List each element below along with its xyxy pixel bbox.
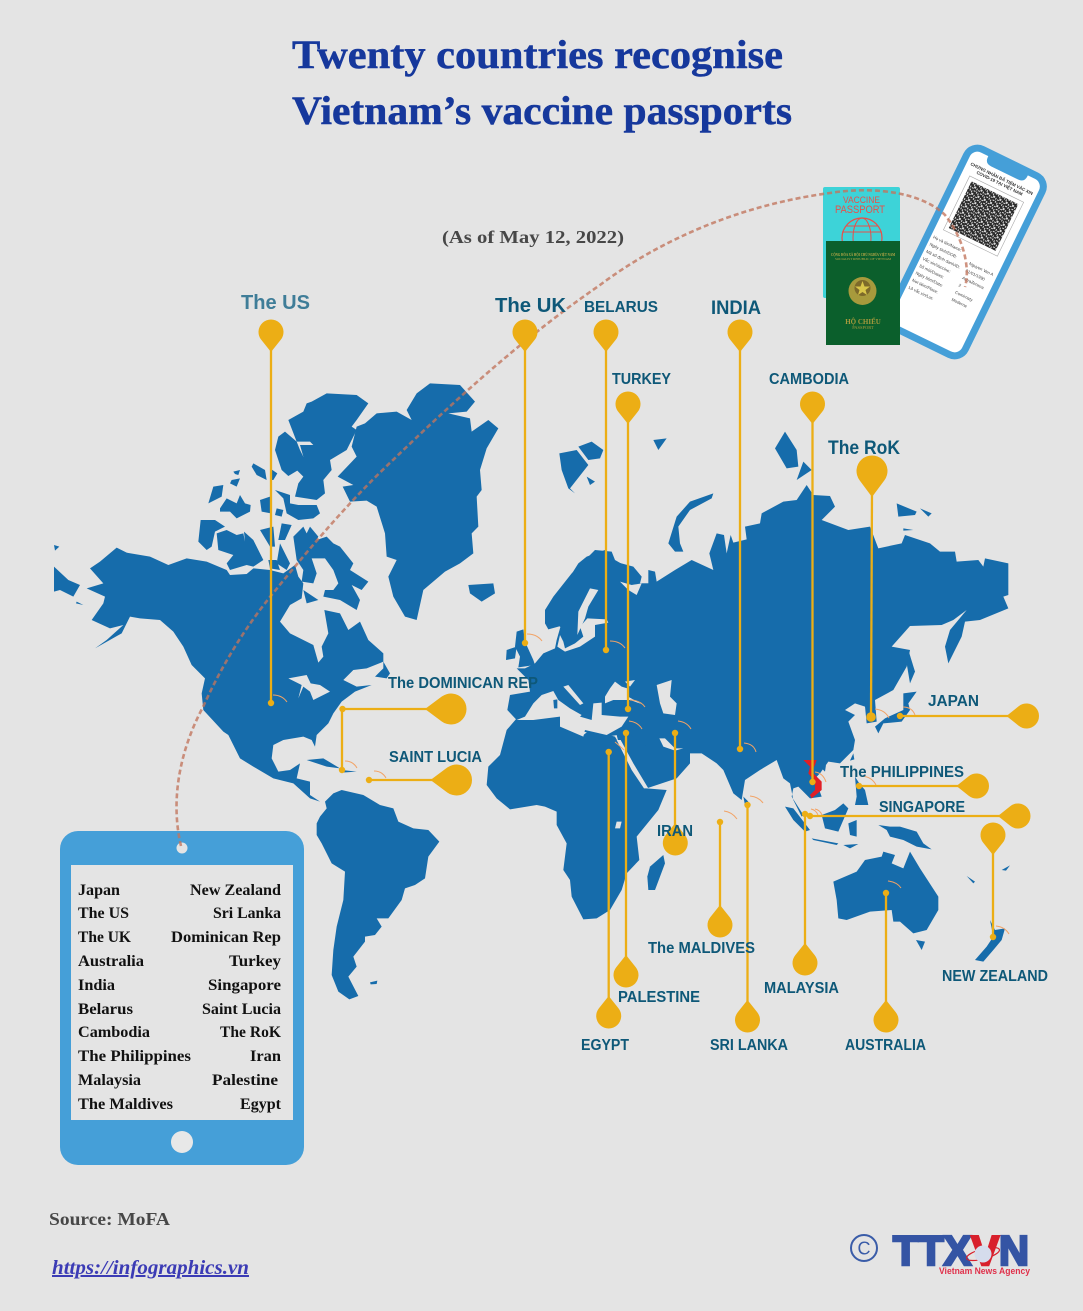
country list: Japan	[78, 882, 120, 899]
pin: Turkey	[616, 392, 645, 712]
map: South America, Africa, Madagascar	[317, 715, 667, 999]
phone with vaccine certificate: Ngày tiêm/Date:	[915, 270, 944, 288]
country list: Cambodia	[78, 1024, 150, 1041]
country list: The US	[78, 905, 129, 922]
country list: Singapore	[208, 977, 281, 994]
pin: Palestine	[614, 721, 642, 987]
phone with vaccine certificate: 01/01/1990	[965, 268, 986, 282]
country labels: EGYPT	[581, 1037, 629, 1054]
pin: Belarus	[594, 320, 625, 653]
country labels: The PHILIPPINES	[840, 764, 964, 781]
title	[292, 32, 792, 133]
country labels: BELARUS	[584, 299, 658, 316]
passport: green Vietnamese passport	[826, 241, 900, 345]
copyright icon	[851, 1235, 877, 1261]
country labels: PALESTINE	[618, 989, 700, 1006]
country labels: INDIA	[711, 298, 761, 319]
phone with vaccine certificate: Số mũi/Doses:	[918, 263, 945, 280]
country list: Egypt	[240, 1096, 282, 1113]
country labels: The UK	[495, 295, 567, 317]
phone with vaccine certificate: Nơi tiêm/Place:	[911, 278, 939, 295]
pin: Malaysia	[792, 811, 818, 975]
source: Source: MoFA	[49, 1209, 170, 1229]
passport: vaccine passport cover: PASSPORT	[835, 204, 885, 216]
country list: Saint Lucia	[202, 1001, 281, 1018]
country list: Australia	[78, 953, 144, 970]
phone with vaccine certificate: Ngày sinh/DOB:	[929, 242, 958, 259]
country labels: SRI LANKA	[710, 1037, 788, 1054]
country list: Malaysia	[78, 1072, 141, 1089]
tablet camera dot	[176, 842, 188, 854]
tablet listing countries	[60, 831, 304, 1165]
map: Eurasia and Arctic islands	[545, 432, 1008, 817]
map pins and connector lines	[258, 320, 1039, 1032]
country labels: The DOMINICAN REP	[388, 675, 538, 692]
map: North America and Greenland	[54, 383, 535, 802]
country labels: The US	[241, 292, 310, 314]
phone with vaccine certificate: Lô vắc xin/Lot:	[908, 285, 934, 301]
pin: Egypt	[596, 742, 624, 1028]
pin: The UK	[512, 320, 542, 646]
map: Europe and surrounding seas	[507, 550, 700, 788]
date note: (As of May 12, 2022)	[442, 227, 624, 248]
country labels: The RoK	[828, 438, 900, 459]
copyright icon: C	[858, 1238, 870, 1258]
phone with vaccine certificate: AstraZeneca	[961, 275, 985, 290]
website link text: https://infographics.vn	[52, 1257, 249, 1279]
TTXVN logo: TTXVN	[893, 1227, 1029, 1274]
map: Southeast Asia and Oceania	[743, 777, 1010, 962]
country list: Dominican Rep	[171, 929, 281, 946]
country list: The Maldives	[78, 1096, 173, 1113]
phone with vaccine certificate: Mã số định danh/ID:	[925, 249, 961, 270]
passport: green Vietnamese passport: PASSPORT	[852, 325, 874, 330]
pin: Iran	[663, 721, 691, 855]
country labels: The MALDIVES	[648, 940, 755, 957]
country list: Sri Lanka	[213, 905, 281, 922]
pin: The Philippines	[856, 774, 989, 798]
pin: Australia	[874, 881, 901, 1032]
country list: The RoK	[220, 1024, 282, 1041]
pin: Cambodia	[800, 392, 826, 785]
TTXVN logo: Vietnam News Agency	[939, 1266, 1031, 1277]
passport: vaccine passport cover: VACCINE	[843, 195, 880, 205]
phone with vaccine certificate: 2	[958, 282, 963, 288]
country labels: MALAYSIA	[764, 980, 839, 997]
title: Vietnam’s vaccine passports	[292, 88, 792, 133]
country labels	[241, 292, 1048, 1054]
country list: The Philippines	[78, 1048, 191, 1065]
dashed flight curve from tablet to phone	[177, 190, 967, 846]
country list: New Zealand	[190, 882, 281, 899]
country list: India	[78, 977, 115, 994]
country list	[78, 882, 282, 1113]
tablet home button	[171, 1131, 193, 1153]
country labels: AUSTRALIA	[845, 1037, 926, 1054]
country list: Iran	[250, 1048, 281, 1065]
country list: The UK	[78, 929, 132, 946]
pin: Japan	[897, 704, 1039, 728]
pin: Saint Lucia	[366, 764, 472, 796]
country labels: JAPAN	[928, 693, 979, 710]
phone with vaccine certificate	[885, 144, 1047, 360]
passport: green Vietnamese passport: SOCIALIST REPUBLIC OF VIETNAM	[835, 257, 891, 261]
pin: The Maldives	[708, 811, 737, 937]
phone with vaccine certificate: Comirnaty	[954, 290, 974, 303]
phone with vaccine certificate: COVID-19 TẠI VIỆT NAM	[976, 170, 1024, 197]
country labels: IRAN	[657, 823, 693, 840]
country list: Palestine	[212, 1072, 278, 1089]
passport: green Vietnamese passport: CỘNG HÒA XÃ HỘI CHỦ NGHĨA VIỆT NAM	[831, 252, 895, 257]
phone with vaccine certificate: Họ và tên/Name:	[932, 234, 963, 253]
passport: green Vietnamese passport: HỘ CHIẾU	[845, 318, 881, 326]
world map	[54, 383, 1010, 999]
pin: Sri Lanka	[735, 796, 763, 1032]
pin: Dominican Rep	[339, 694, 467, 773]
pin: The US	[258, 320, 287, 706]
phone with vaccine certificate: CHỨNG NHẬN ĐÃ TIÊM VẮC XIN	[970, 161, 1034, 196]
country list: Belarus	[78, 1001, 133, 1018]
pin: Singapore	[807, 804, 1030, 828]
pin: India	[728, 320, 756, 752]
phone with vaccine certificate: Moderna	[951, 297, 968, 309]
pin: The RoK	[856, 455, 889, 722]
phone with vaccine certificate: Nguyen Van A	[968, 261, 995, 277]
pin: New Zealand	[980, 823, 1009, 940]
country labels: SINGAPORE	[879, 799, 965, 816]
country labels: SAINT LUCIA	[389, 749, 482, 766]
phone with vaccine certificate: Vắc xin/Vaccine:	[922, 256, 952, 274]
country labels: NEW ZEALAND	[942, 968, 1048, 985]
title: Twenty countries recognise	[292, 32, 783, 77]
country list: Turkey	[229, 953, 281, 970]
country labels: TURKEY	[612, 371, 671, 388]
country labels: CAMBODIA	[769, 371, 849, 388]
vietnam highlight	[803, 760, 822, 798]
passport: vaccine passport cover	[823, 187, 900, 298]
